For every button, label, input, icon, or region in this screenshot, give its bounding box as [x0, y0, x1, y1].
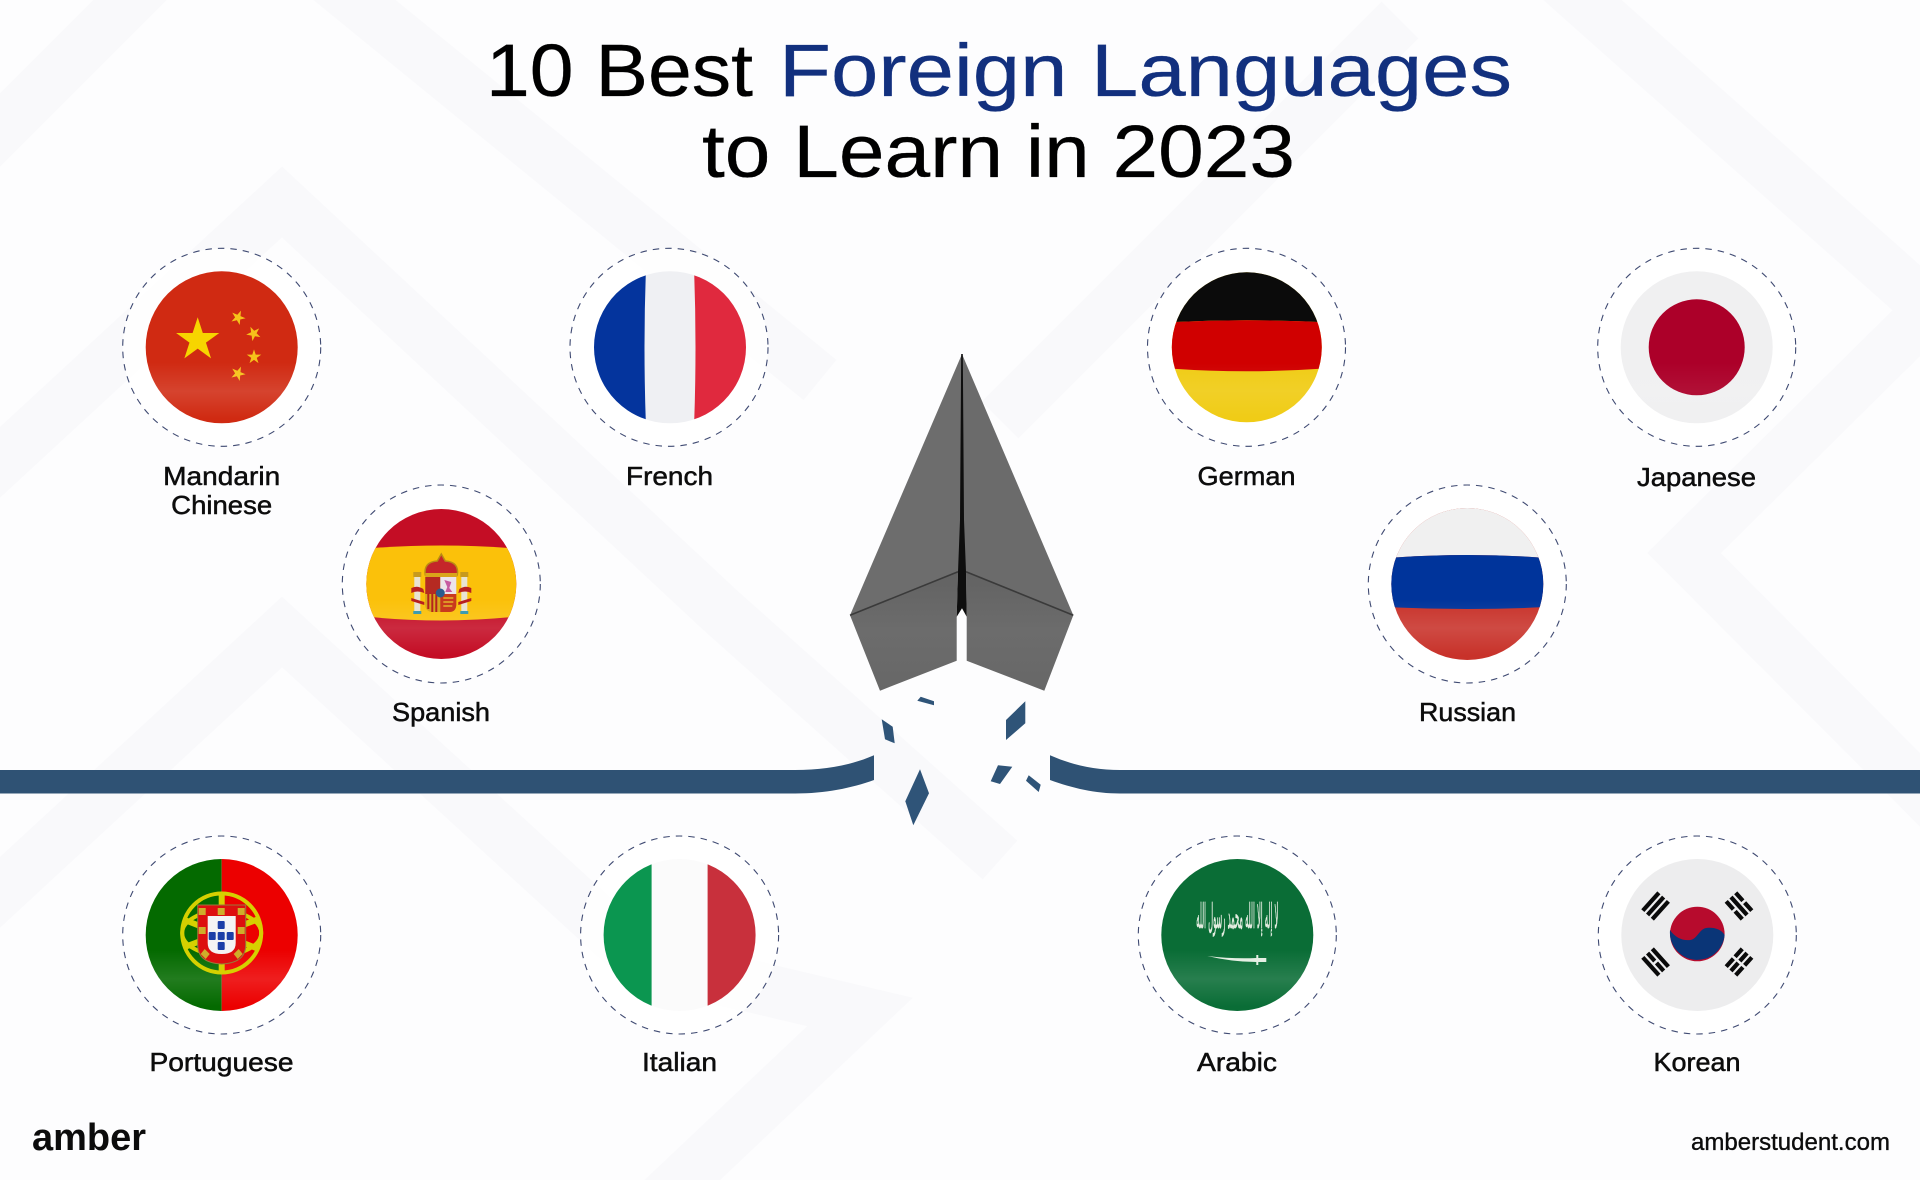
label: German: German: [1198, 461, 1296, 491]
logo: amber: amber: [32, 1117, 146, 1159]
language: French: [570, 248, 768, 491]
title: Foreign Languages: [779, 29, 1512, 112]
label: French: French: [626, 461, 713, 491]
label: Japanese: Japanese: [1637, 462, 1756, 492]
label: Mandarin Chinese: Mandarin: [163, 461, 280, 491]
title: 10 Best: [486, 29, 753, 112]
language: Spanish: [342, 485, 540, 727]
coat of arms: [182, 893, 261, 973]
label: Russian: Russian: [1419, 697, 1516, 727]
label: Mandarin Chinese: [163, 461, 280, 520]
flag: Italy: [604, 864, 756, 1006]
coat of arms: [411, 554, 471, 614]
language: Arabic: [1138, 836, 1336, 1077]
flag: Russia: [1387, 504, 1547, 664]
sword: [1207, 955, 1266, 965]
language: German: [1148, 248, 1346, 491]
website url: amberstudent.com: [1691, 1129, 1890, 1156]
label: Portuguese: Portuguese: [150, 1047, 294, 1077]
flag: South Korea: [1617, 855, 1777, 1015]
language: Portuguese: [123, 836, 321, 1077]
flag: France: [594, 272, 746, 423]
icon: paper plane: [850, 354, 1073, 691]
language: Korean: [1598, 836, 1796, 1077]
label: Spanish: Spanish: [392, 697, 490, 727]
label: Mandarin Chinese: Chinese: [171, 490, 272, 520]
flag: Saudi Arabia: [1157, 855, 1317, 1015]
title: to Learn in 2023: [702, 110, 1295, 193]
title: [486, 29, 1512, 193]
road fragments: [882, 697, 1041, 825]
label: Korean: Korean: [1654, 1047, 1740, 1077]
label: Arabic: Arabic: [1197, 1047, 1277, 1077]
flag: Japan: [1620, 272, 1772, 423]
road broken by the paper plane: [0, 755, 1920, 794]
language: Japanese: [1598, 248, 1796, 492]
flag: Germany: [1172, 272, 1322, 422]
language: Mandarin Chinese: [123, 248, 321, 520]
label: Italian: Italian: [642, 1047, 717, 1077]
language: Russian: [1368, 485, 1566, 727]
flag: Spain: [366, 509, 516, 659]
flag: Portugal: [142, 855, 302, 1015]
flag: China: [142, 267, 302, 427]
text: لا إله إلا الله محمد رسول الله: [1196, 897, 1278, 937]
language: Italian: [581, 836, 779, 1077]
